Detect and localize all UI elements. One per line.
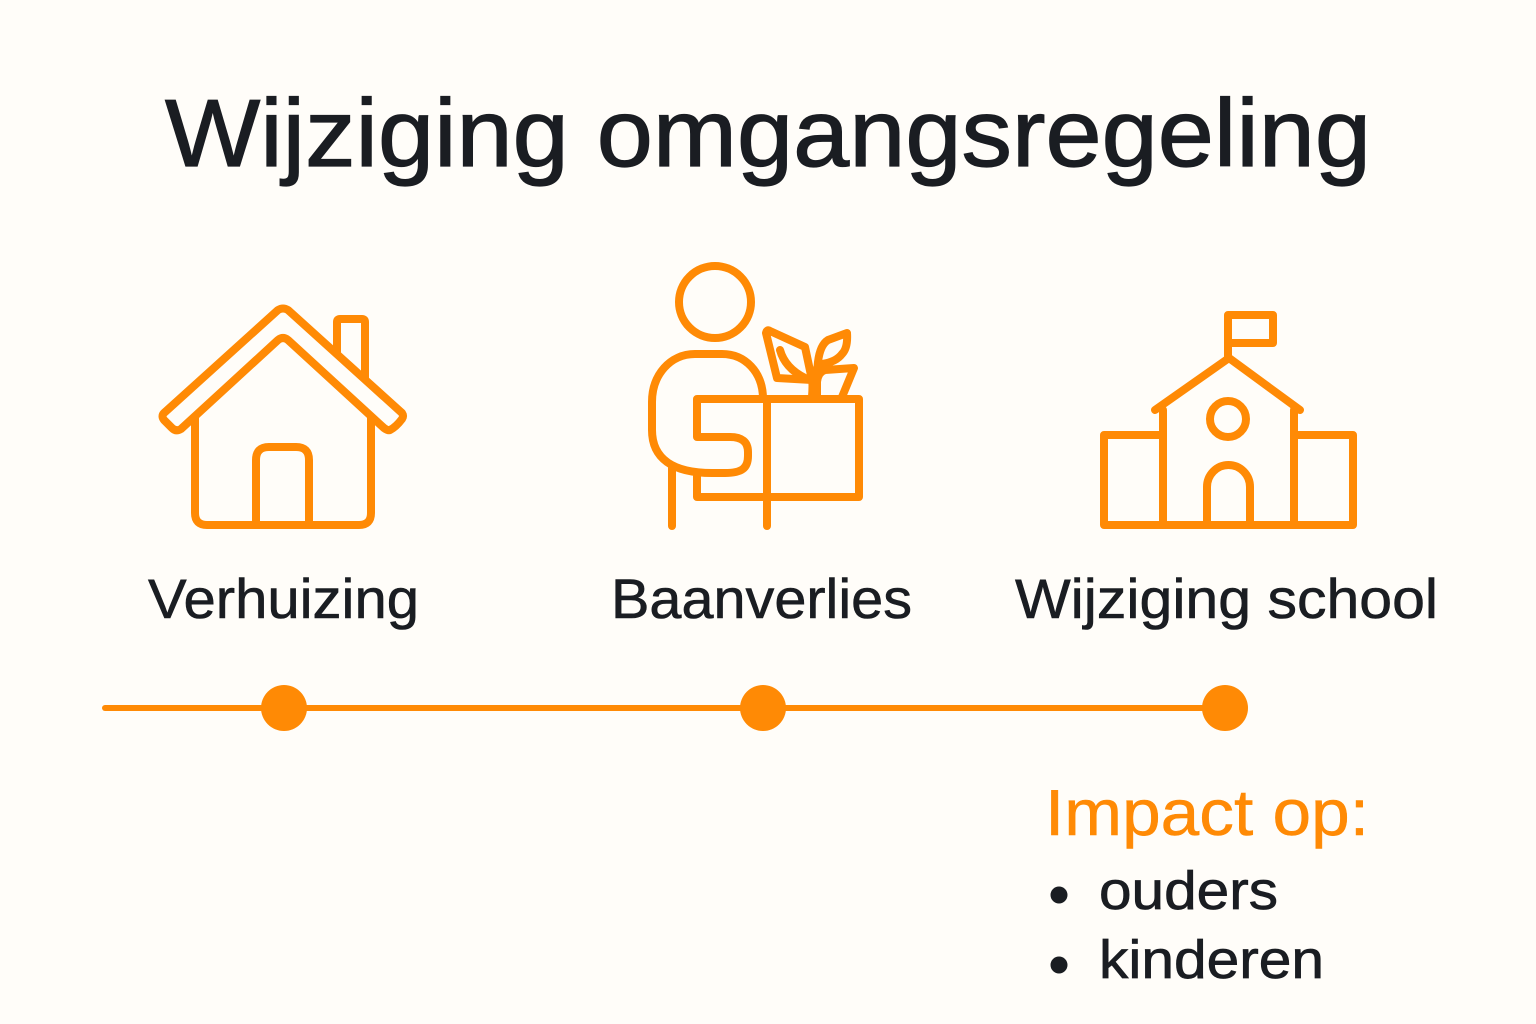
icon: person with box (652, 266, 859, 526)
timeline (105, 685, 1248, 731)
title: Wijziging omgangsregeling (165, 80, 1371, 187)
impact heading: Impact op: (1045, 776, 1369, 849)
bullet: kinderen: kinderen (1099, 930, 1324, 990)
label: Verhuizing: Verhuizing (148, 567, 419, 630)
bullet: ouders: ouders (1099, 861, 1278, 921)
label: Baanverlies: Baanverlies (611, 567, 912, 630)
label: Wijziging school: Wijziging school (1015, 567, 1438, 630)
impact block (1045, 776, 1369, 990)
icon: school (1104, 315, 1353, 525)
icon: house (162, 308, 403, 525)
